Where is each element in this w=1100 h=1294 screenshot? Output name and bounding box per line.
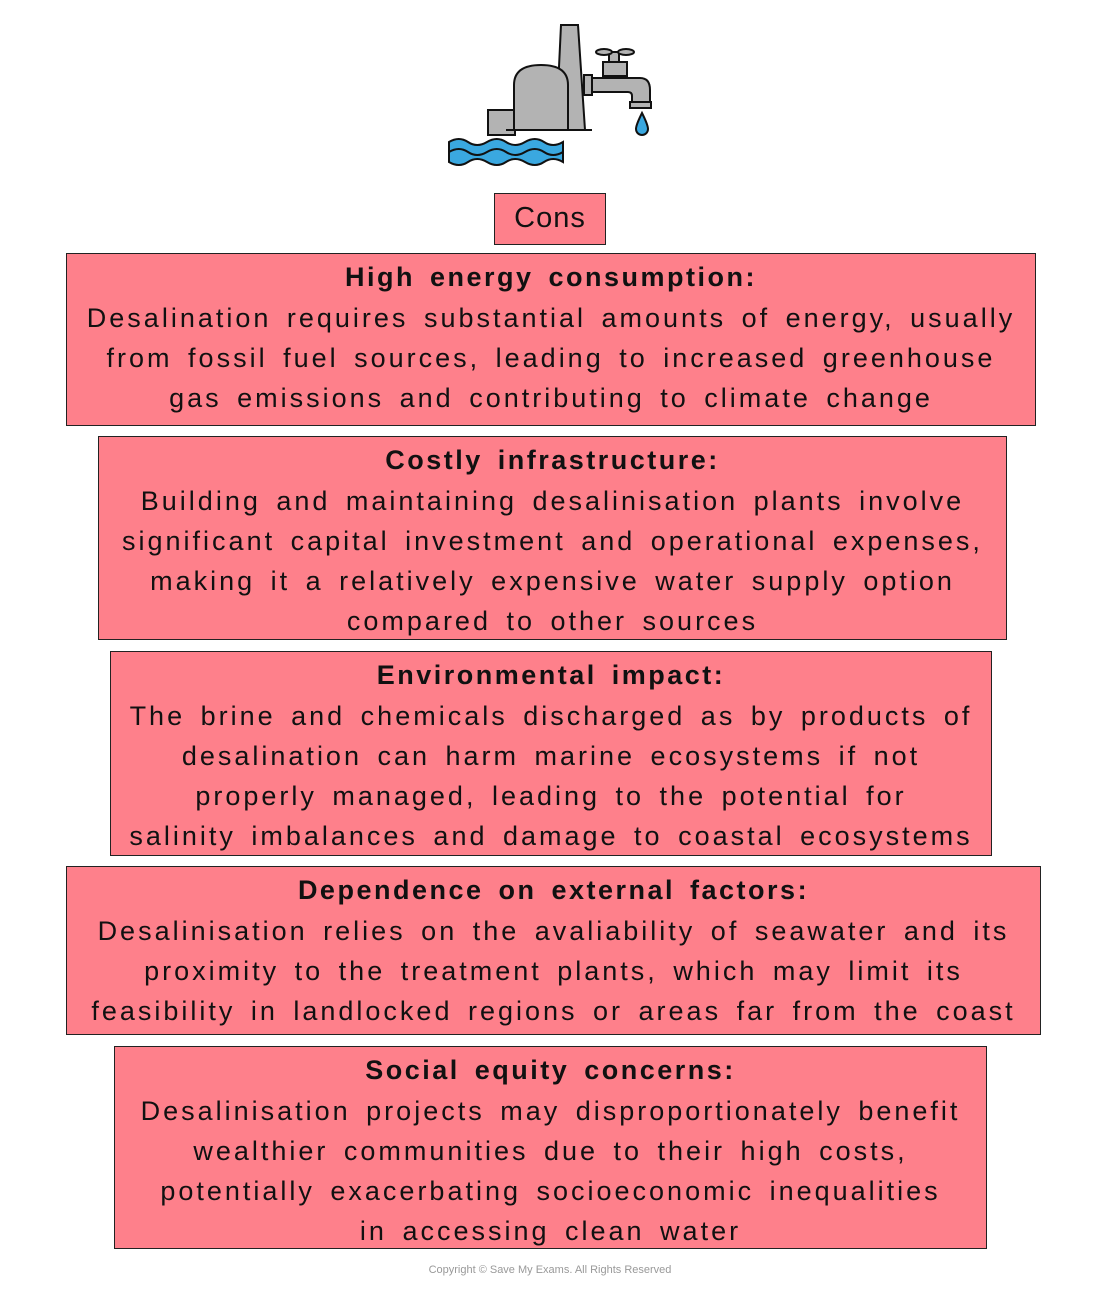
panel: social equity concerns: potentially exacerbating socioeconomic inequalities	[160, 1176, 941, 1206]
panel: costly infrastructure	[98, 436, 1007, 640]
panel: social equity concerns: Social equity concerns:	[365, 1055, 736, 1085]
panel: environmental impact: The brine and chemicals discharged as by products of	[130, 701, 972, 731]
panel: costly infrastructure: compared to other sources	[347, 606, 758, 636]
panel: dependence on external factors: feasibility in landlocked regions or areas far from the coast	[91, 996, 1016, 1026]
panel: dependence on external factors: proximity to the treatment plants, which may limit its	[144, 956, 963, 986]
heading: Cons	[494, 193, 606, 245]
panel: environmental impact: properly managed, leading to the potential for	[195, 781, 907, 811]
panel: social equity concerns: wealthier communities due to their high costs,	[193, 1136, 908, 1166]
panel: environmental impact: salinity imbalances and damage to coastal ecosystems	[129, 821, 973, 851]
panel: dependence on external factors: Desalinisation relies on the avaliability of seawater and its	[98, 916, 1009, 946]
panel: high energy consumption	[66, 253, 1036, 426]
panel: costly infrastructure: significant capital investment and operational expenses,	[122, 526, 983, 556]
heading: Cons: Cons	[514, 202, 586, 234]
panel: dependence on external factors	[66, 866, 1041, 1035]
panel: costly infrastructure: making it a relatively expensive water supply option	[150, 566, 955, 596]
panel: environmental impact	[110, 651, 992, 856]
panel: high energy consumption: gas emissions and contributing to climate change	[169, 383, 933, 413]
panel: high energy consumption: High energy consumption:	[345, 262, 757, 292]
panel: environmental impact: Environmental impact:	[377, 660, 725, 690]
panel: high energy consumption: from fossil fuel sources, leading to increased greenhouse	[107, 343, 995, 373]
copyright text: Copyright © Save My Exams. All Rights Reserved	[429, 1264, 671, 1276]
icon: desalination plant with tap	[448, 24, 652, 166]
panel: high energy consumption: Desalination requires substantial amounts of energy, usually	[87, 303, 1015, 333]
panel: social equity concerns	[114, 1046, 987, 1249]
panel: costly infrastructure: Building and maintaining desalinisation plants involve	[141, 486, 964, 516]
panel: social equity concerns: Desalinisation projects may disproportionately benefit	[141, 1096, 960, 1126]
panel: costly infrastructure: Costly infrastructure:	[385, 445, 720, 475]
panel: dependence on external factors: Dependence on external factors:	[298, 875, 809, 905]
panel: social equity concerns: in accessing clean water	[360, 1216, 741, 1246]
panel: environmental impact: desalination can harm marine ecosystems if not	[182, 741, 920, 771]
icon: waves	[449, 139, 563, 165]
icon: water drop	[636, 113, 648, 135]
